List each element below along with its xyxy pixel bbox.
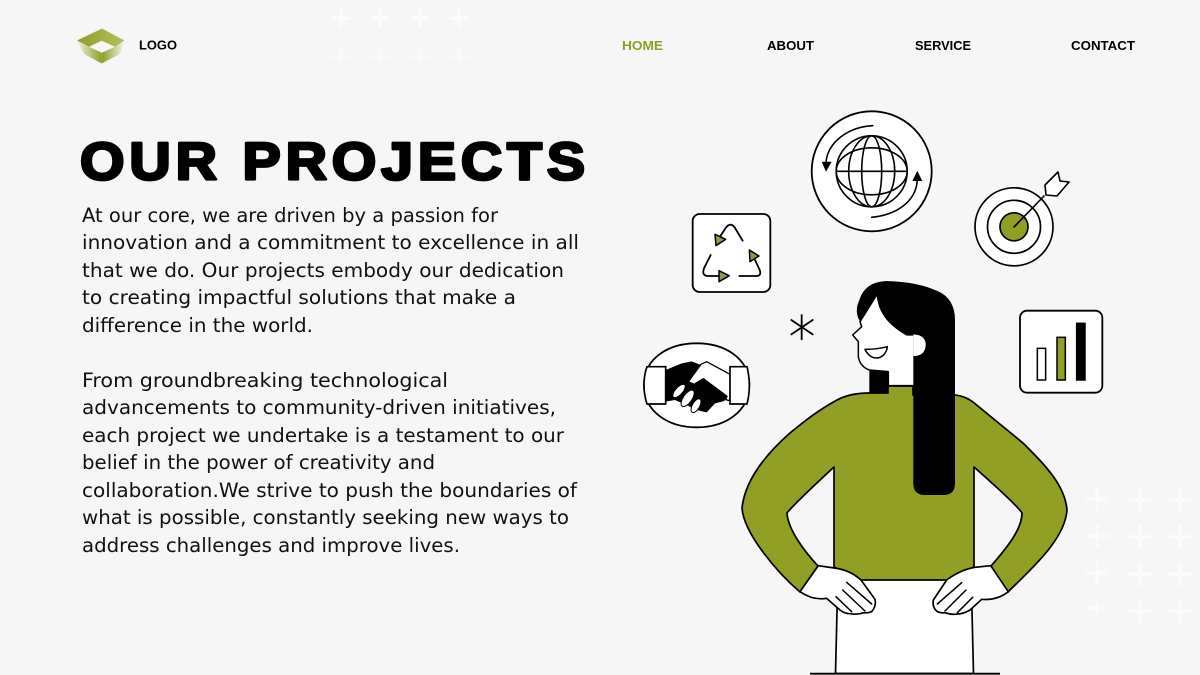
paragraph two: each project we undertake is a testament to our (82, 424, 565, 447)
logo (77, 28, 177, 64)
left hand (800, 566, 875, 614)
mouth (865, 347, 887, 358)
sweater (742, 386, 1067, 592)
right hand (933, 566, 1008, 614)
handshake: light hand (688, 362, 730, 401)
icon: recycling arrows (693, 214, 770, 292)
paragraph one: At our core, we are driven by a passion for (82, 204, 499, 227)
paragraph two: belief in the power of creativity and (82, 451, 435, 474)
icon: globe with rotating arrows (812, 111, 932, 231)
nav: contact: CONTACT (1071, 38, 1135, 53)
paragraph two: address challenges and improve lives. (82, 534, 460, 557)
paragraph one: to creating impactful solutions that make a (82, 286, 516, 309)
illustration: woman (742, 281, 1067, 674)
icon: asterisk sparkle (791, 315, 813, 339)
navigation (622, 38, 1135, 53)
head and hair (853, 281, 955, 495)
paragraph one: innovation and a commitment to excellence in all (82, 231, 579, 254)
nav: home: HOME (622, 38, 663, 53)
paragraph one: difference in the world. (82, 314, 313, 337)
paragraph two: advancements to community-driven initiatives, (82, 396, 556, 419)
handshake: cuffs (644, 367, 666, 404)
paragraph two (82, 369, 578, 557)
neck shadow (869, 370, 888, 393)
icon: handshake (644, 343, 749, 427)
skirt (836, 570, 974, 674)
body text (82, 204, 579, 557)
paragraph two: From groundbreaking technological (82, 369, 448, 392)
title: OUR PROJECTS (80, 131, 590, 191)
icon: target with arrow (975, 172, 1069, 266)
handshake: dark hand (666, 361, 727, 412)
ear (913, 334, 926, 356)
paragraph one (82, 204, 579, 337)
hair (857, 281, 955, 495)
floor line (810, 673, 1000, 675)
logo mark (77, 28, 124, 64)
logo text: LOGO (139, 38, 177, 52)
nav: service: SERVICE (915, 38, 971, 53)
paragraph two: what is possible, constantly seeking new ways to (82, 506, 569, 529)
decorative plus pattern: bottom right (1086, 488, 1192, 623)
paragraph two: collaboration.We strive to push the boundaries of (82, 479, 578, 502)
decorative plus pattern: top (332, 9, 468, 66)
paragraph one: that we do. Our projects embody our dedication (82, 259, 564, 282)
hands (800, 566, 1008, 614)
nav: about: ABOUT (767, 38, 814, 53)
icon: bar chart card (1020, 311, 1102, 393)
neck and face (853, 295, 917, 386)
